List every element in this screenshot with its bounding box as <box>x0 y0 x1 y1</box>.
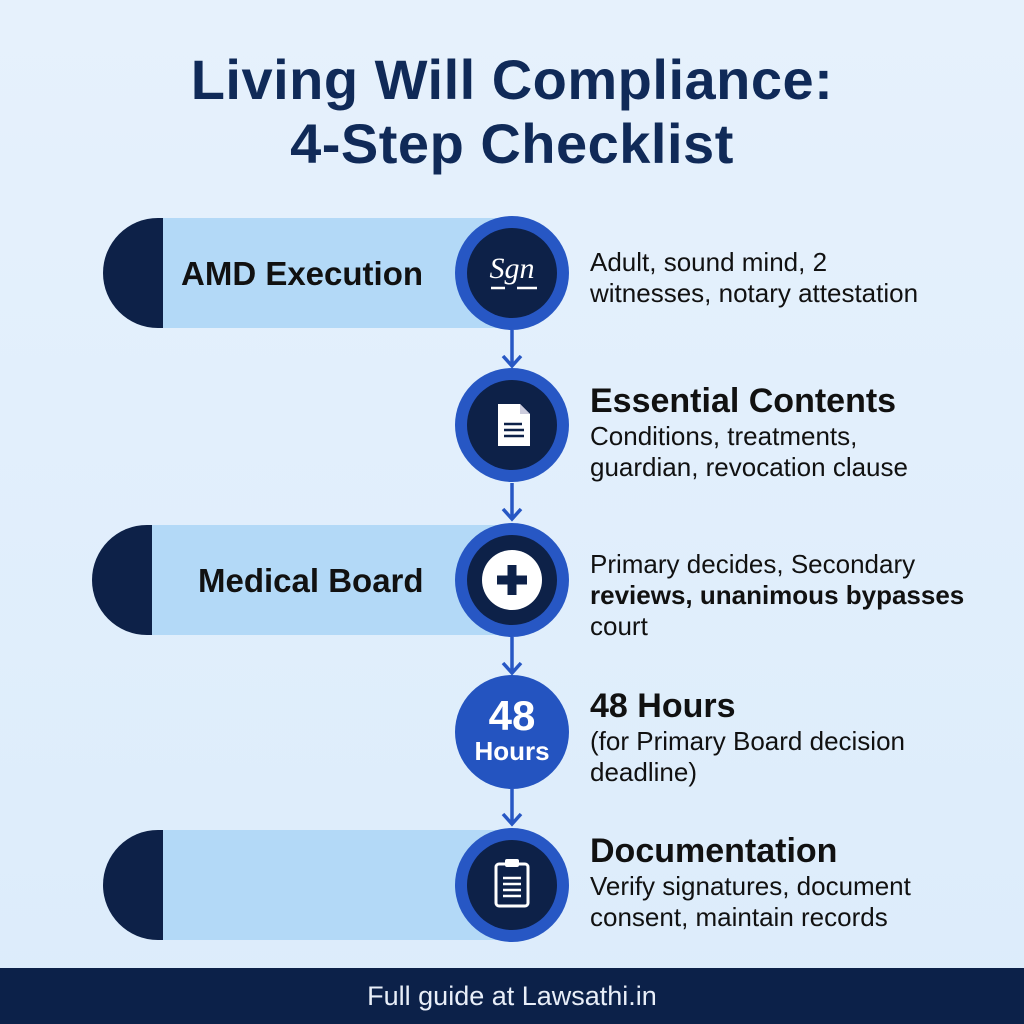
band: Documentation <box>103 830 497 940</box>
text: 48 Hours <box>590 687 905 787</box>
text: Medical Board: reviews, unanimous bypasses <box>590 580 964 610</box>
icon: signature <box>455 216 569 330</box>
icon: 48 hours: 48 <box>489 692 535 739</box>
text: 48 Hours: (for Primary Board decision <box>590 726 905 756</box>
band: Medical Board <box>92 525 497 635</box>
text: Medical Board: court <box>590 611 648 641</box>
title <box>191 48 833 175</box>
title: Living Will Compliance: <box>191 48 833 111</box>
text: Essential Contents: guardian, revocation clause <box>590 452 908 482</box>
footer: Full guide at Lawsathi.in <box>367 981 657 1011</box>
text: Essential Contents: Essential Contents <box>590 382 896 420</box>
icon: document <box>455 368 569 482</box>
arrow 3 <box>502 637 522 675</box>
icon: 48 hours <box>455 675 569 789</box>
footer <box>0 968 1024 1024</box>
text: Documentation: Documentation <box>590 832 837 870</box>
arrow 1 <box>502 330 522 368</box>
text: Documentation <box>590 832 911 932</box>
arrow 2 <box>502 483 522 522</box>
text: 48 Hours: 48 Hours <box>590 687 736 725</box>
icon: 48 hours: Hours <box>474 736 550 766</box>
text: Medical Board: Primary decides, Secondary <box>590 549 915 579</box>
title: 4-Step Checklist <box>290 112 734 175</box>
text: Essential Contents <box>590 382 908 482</box>
band: AMD Execution <box>103 218 497 328</box>
text: Documentation: consent, maintain records <box>590 902 888 932</box>
icon: clipboard <box>455 828 569 942</box>
text: AMD Execution: Adult, sound mind, 2 <box>590 247 827 277</box>
text: Medical Board <box>590 549 964 641</box>
arrow 4 <box>502 788 522 826</box>
text: 48 Hours: deadline) <box>590 757 697 787</box>
text: Documentation: Verify signatures, document <box>590 871 911 901</box>
icon: medical cross <box>455 523 569 637</box>
band: Medical Board: Medical Board <box>198 562 424 599</box>
text: Essential Contents: Conditions, treatments, <box>590 421 857 451</box>
band: AMD Execution: AMD Execution <box>181 255 423 292</box>
text: AMD Execution: witnesses, notary attestation <box>590 278 918 308</box>
text: AMD Execution <box>590 247 918 308</box>
icon: signature: Sgn <box>490 252 534 285</box>
